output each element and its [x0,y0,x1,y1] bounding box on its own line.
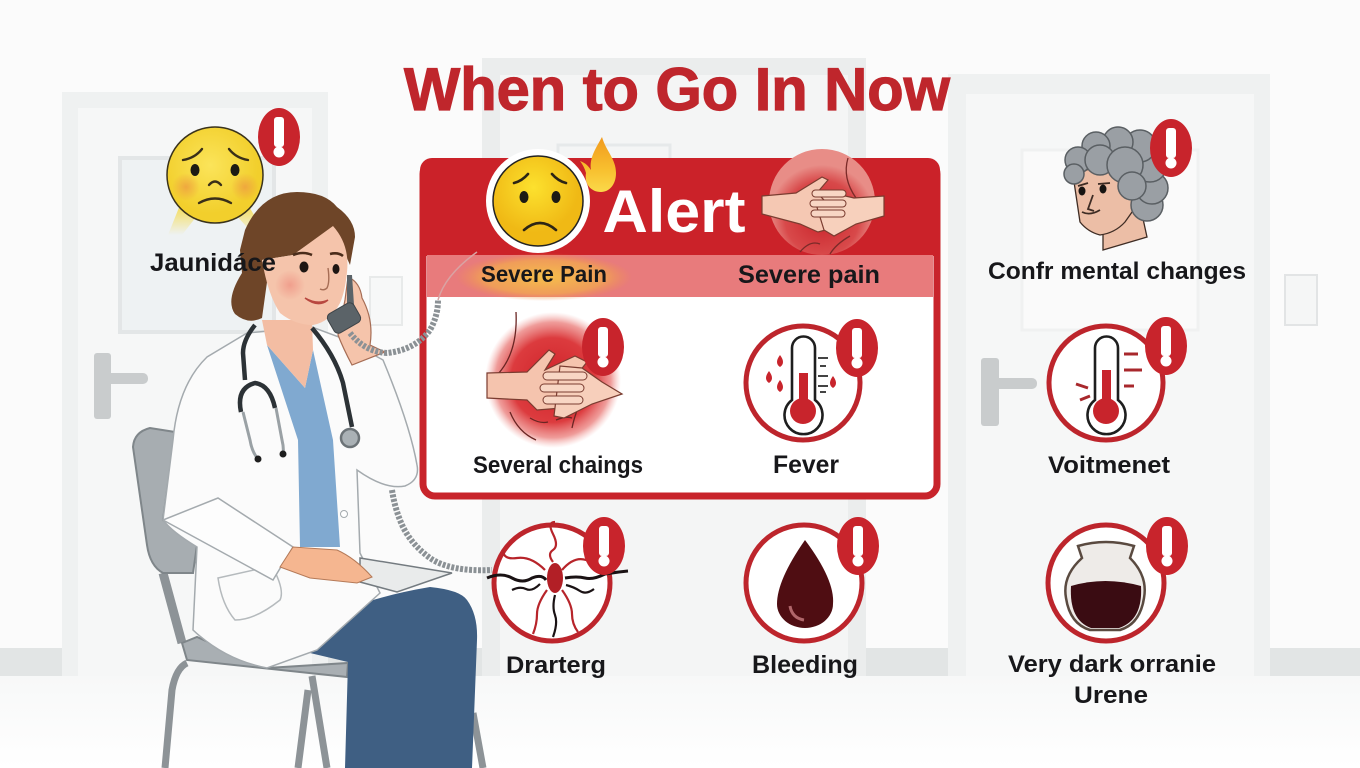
symptom: vomiting [1048,317,1187,479]
scrubs [267,345,340,547]
badge: exclamation [258,108,300,166]
label: fever: Fever [773,451,839,479]
phone cord [350,300,438,353]
alert heading: Alert [602,178,746,245]
badge: exclamation [583,517,625,575]
label second line: Urene [1074,682,1148,709]
badge: exclamation [837,517,879,575]
tablet [360,558,452,592]
stethoscope [240,325,359,462]
icon: grey-haired head [1064,127,1168,250]
icon: yellow face [167,127,266,235]
telephone [326,275,362,335]
coat button [340,510,348,518]
icon: hands on red abdomen [762,149,884,255]
label: severe pain left: Severe Pain [481,261,607,287]
neck [262,320,313,388]
symptom: jaundice [167,108,300,235]
label: jaundice: Jaunidáce [150,249,276,277]
badge: exclamation [1145,317,1187,375]
coat pocket [218,566,281,620]
panel body [423,162,937,496]
label: Very dark orranie [1008,651,1216,678]
icon: thermometer [1049,326,1163,440]
symptom: darkening [487,517,628,679]
icon: abdominal pain [485,312,622,448]
curly hair [1064,127,1168,221]
lab coat [163,327,418,668]
face [262,226,347,325]
icon: blood drop [746,525,862,641]
label: Drarterg [506,652,606,679]
label: Confr mental changes [988,258,1246,285]
label: Bleeding [752,651,858,679]
panel: alert [420,137,940,496]
icon: veins [487,522,628,641]
badge: exclamation [1150,119,1192,177]
icon: thermometer [746,326,860,440]
symptom: confusion / mental changes [988,119,1246,285]
facial features [275,253,343,304]
label: several changes: Several chaings [473,452,643,479]
faint cord over strip [438,252,477,300]
panel header band [420,158,940,256]
badge: exclamation [1146,517,1188,575]
label: Voitmenet [1048,452,1170,479]
hand on phone [338,277,385,365]
badge: exclamation [836,319,878,377]
title: When to Go In Now [404,56,950,123]
symptom: bleeding [746,517,879,679]
icon: jar of dark urine [1048,525,1164,641]
hair [231,192,355,321]
symptom: dark urine [1008,517,1216,709]
subheading strip [427,255,933,297]
chair [133,428,483,768]
coat sleeve [163,498,293,580]
doctor on the phone [133,192,492,768]
icon: worried face with flame [486,137,616,253]
lower phone cord [392,490,492,570]
trousers [310,587,477,768]
glow behind label [456,253,632,301]
hand on lap [280,547,372,583]
label: severe pain right: Severe pain [738,261,880,289]
badge: exclamation [582,318,624,376]
